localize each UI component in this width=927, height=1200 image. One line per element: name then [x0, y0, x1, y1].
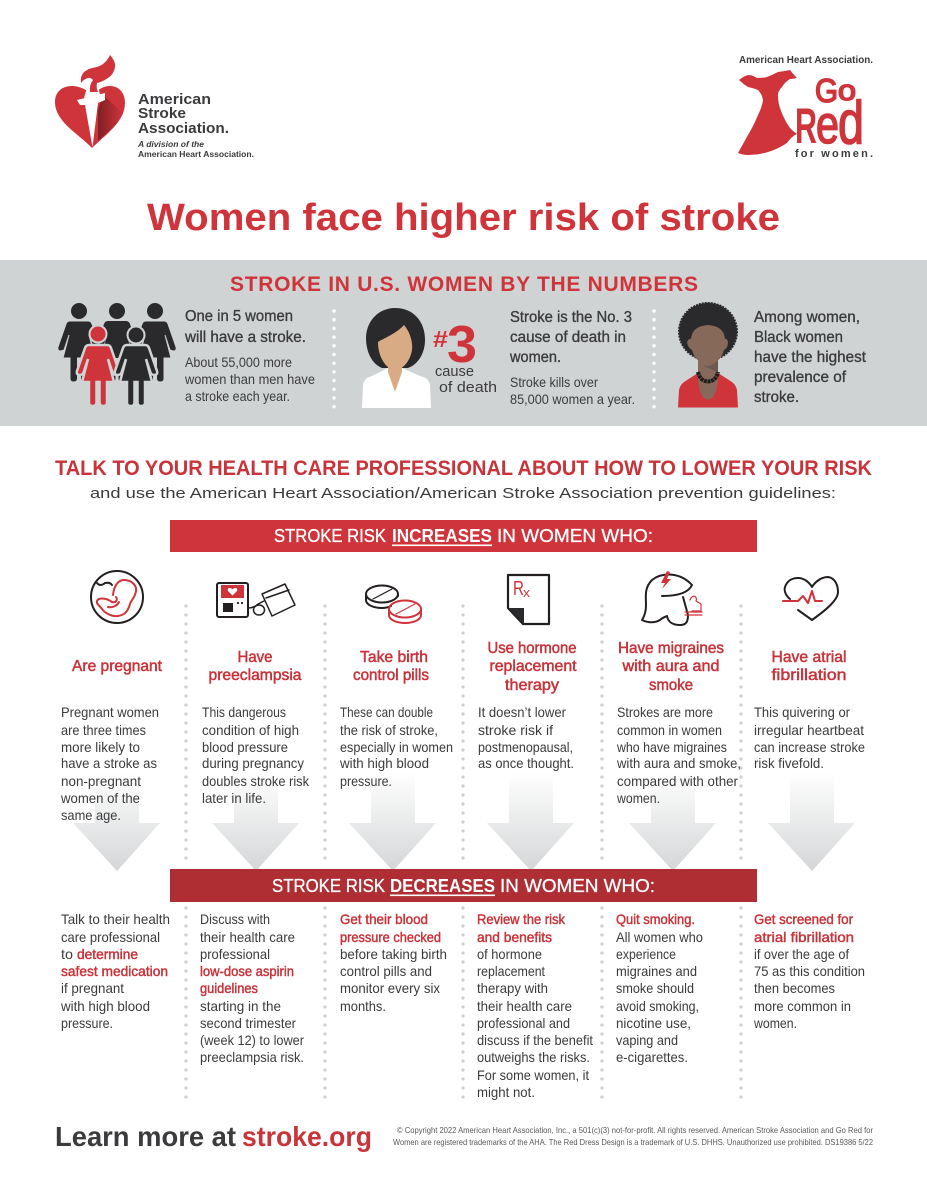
banner: stroke risk decreases: IN WOMEN WHO: [500, 876, 655, 896]
column dividers [186, 606, 741, 1100]
icon: prescription sheet [508, 575, 549, 624]
advice: pregnant: Talk to their health [61, 911, 170, 927]
footer: learn more: stroke.org [242, 1121, 372, 1152]
advice: hormone therapy [477, 911, 593, 1100]
advice: migraines: migraines and [616, 963, 697, 979]
stat: one in 5 women: One in 5 women [185, 308, 293, 325]
advice: hormone therapy: and benefits [477, 929, 552, 945]
icon: heart with pulse [783, 577, 838, 620]
stat: highest prevalence: have the highest [754, 349, 867, 366]
stat: one in 5 women [184, 308, 315, 404]
column: have atrial fibrillation: irregular heartbeat [754, 722, 864, 738]
stat: number 3 cause of death: Stroke is the No. 3 [510, 309, 632, 326]
advice: preeclampsia: professional [200, 946, 270, 962]
panel: stroke by the numbers [0, 260, 927, 426]
advice: migraines [616, 911, 703, 1065]
icon: blood pressure monitor [217, 583, 295, 617]
advice: atrial fibrillation: women. [753, 1015, 797, 1031]
column: take birth control pills [339, 586, 453, 789]
advice: hormone therapy: outweighs the risks. [477, 1049, 590, 1065]
column: have preeclampsia [202, 583, 310, 806]
column: have migraines with aura and smoke: Have migraines [618, 640, 724, 657]
advice: hormone therapy: professional and [477, 1015, 570, 1031]
column: have preeclampsia: blood pressure [202, 739, 288, 755]
footer: copyright: © Copyright 2022 American Heart Association, Inc., a 501(c)(3) not-for-profit. All rights reserved. American Stroke Association and Go Red for [397, 1125, 873, 1135]
stat graphic: #3 cause of death: 3 [447, 316, 477, 374]
logo: Go Red for Women: for women. [795, 148, 873, 160]
logo: American Stroke Association: Association. [138, 121, 229, 137]
column: take birth control pills: especially in women [340, 739, 453, 755]
advice: preeclampsia: (week 12) to lower [200, 1032, 304, 1048]
logo: Go Red for Women: R [795, 98, 817, 154]
column: take birth control pills: These can double [340, 704, 433, 720]
column: take birth control pills: pressure. [340, 773, 392, 789]
stat graphic: #3 cause of death: cause [435, 363, 474, 380]
column: use hormone replacement therapy: stroke risk if [478, 722, 553, 738]
column: have migraines with aura and smoke: who have migraines [616, 739, 727, 755]
advice: pregnant: to [61, 946, 73, 962]
heading: talk to your health care professional: TALK TO YOUR HEALTH CARE PROFESSIONAL ABOUT HOW TO LOWER YOUR RISK [55, 457, 872, 480]
advice: pregnant: pressure. [61, 1015, 113, 1031]
column: take birth control pills: the risk of stroke, [340, 722, 438, 738]
stat: highest prevalence: Among women, [754, 309, 860, 326]
banner: stroke risk decreases [170, 869, 757, 902]
advice: birth control: months. [340, 998, 386, 1014]
advice: preeclampsia: guidelines [200, 980, 258, 996]
column: have migraines with aura and smoke: women. [616, 790, 660, 806]
arrows: risk decreases [73, 772, 855, 871]
footer: learn more: Learn more at [55, 1121, 236, 1152]
advice: preeclampsia: preeclampsia risk. [200, 1049, 304, 1065]
column: take birth control pills: Take birth [360, 649, 428, 666]
column: are pregnant: Pregnant women [61, 704, 159, 720]
advice: migraines: smoke should [616, 980, 694, 996]
advice: preeclampsia [200, 911, 304, 1065]
column: have atrial fibrillation [754, 577, 865, 771]
column: are pregnant: women of the [60, 790, 140, 806]
banner: stroke risk increases [170, 520, 757, 552]
advice: pregnant [60, 911, 170, 1031]
advice: birth control: Get their blood [340, 911, 428, 927]
advice: hormone therapy: replacement [477, 963, 545, 979]
icon: red dress [738, 70, 797, 155]
stat: number 3 cause of death: women. [509, 349, 561, 366]
logo: Go Red for Women: G [815, 72, 838, 109]
banner: stroke risk increases: IN WOMEN WHO: [497, 526, 653, 546]
advice: preeclampsia: low-dose aspirin [200, 963, 294, 979]
column: are pregnant: more likely to [61, 739, 140, 755]
stat: one in 5 women: About 55,000 more [185, 354, 292, 370]
advice: preeclampsia: their health care [200, 929, 295, 945]
column: have preeclampsia: doubles stroke risk [202, 773, 310, 789]
stat: highest prevalence: stroke. [754, 389, 799, 406]
column: have preeclampsia: during pregnancy [202, 755, 304, 771]
logo: Go Red for Women: e [816, 95, 839, 155]
advice: atrial fibrillation: atrial fibrillation [754, 929, 854, 945]
advice: migraines: Quit smoking. [616, 911, 695, 927]
advice: pregnant: with high blood [60, 998, 150, 1014]
advice: preeclampsia: starting in the [200, 998, 281, 1014]
icon: woman with dark hair [362, 308, 431, 408]
column: use hormone replacement therapy: as once thought. [478, 755, 574, 771]
column: use hormone replacement therapy: Use hormone [488, 640, 577, 657]
advice: atrial fibrillation: more common in [754, 998, 851, 1014]
advice: preeclampsia: Discuss with [200, 911, 270, 927]
advice: migraines: avoid smoking, [616, 998, 699, 1014]
icon: heart and torch [55, 55, 125, 148]
logo: Go Red for Women: o [838, 75, 856, 107]
stat: number 3 cause of death: Stroke kills over [510, 374, 598, 390]
column: have migraines with aura and smoke: common in women [617, 722, 722, 738]
icon: prescription sheet: R [513, 578, 524, 600]
logo: American Stroke Association: American [138, 92, 211, 108]
logo: American Stroke Association: A division of the [137, 140, 205, 149]
column: have preeclampsia: preeclampsia [208, 667, 302, 684]
advice: migraines: nicotine use, [616, 1015, 691, 1031]
column: have atrial fibrillation: can increase stroke [754, 739, 865, 755]
subheading: prevention guidelines: and use the American Heart Association/American Stroke Association prevention guidelines: [90, 485, 836, 502]
advice: hormone therapy: might not. [477, 1084, 535, 1100]
stat: one in 5 women: will have a stroke. [184, 329, 306, 346]
column: have preeclampsia: condition of high [202, 722, 299, 738]
column: use hormone replacement therapy: replacement [490, 658, 577, 675]
banner: stroke risk increases: STROKE RISK [274, 526, 386, 546]
logo: Go Red for Women [738, 54, 873, 160]
stat: highest prevalence: Black women [754, 329, 843, 346]
icon: group of women [58, 303, 176, 406]
column: have migraines with aura and smoke: compared with other [617, 773, 738, 789]
column: have preeclampsia: later in life. [202, 790, 266, 806]
stat: one in 5 women: a stroke each year. [185, 388, 290, 404]
footer: copyright [393, 1125, 873, 1147]
stat graphic: #3 cause of death: # [433, 326, 448, 352]
stat: number 3 cause of death [509, 309, 635, 407]
advice: atrial fibrillation: then becomes [754, 980, 835, 996]
column: use hormone replacement therapy: It doesn’t lower [478, 704, 566, 720]
advice: birth control: control pills and [340, 963, 432, 979]
column: have migraines with aura and smoke: Strokes are more [617, 704, 713, 720]
stat: number 3 cause of death: 85,000 women a year. [510, 391, 635, 407]
column: have atrial fibrillation: risk fivefold. [754, 755, 824, 771]
logo: Go Red for Women: American Heart Association. [739, 54, 873, 66]
stat: highest prevalence: prevalence of [754, 369, 847, 386]
banner: stroke risk decreases: STROKE RISK [272, 876, 385, 896]
stat graphic: #3 cause of death [433, 316, 497, 396]
banner: stroke risk decreases: DECREASES [390, 876, 495, 896]
advice: pregnant: if pregnant [61, 980, 124, 996]
advice: pregnant: determine [77, 946, 138, 962]
icon: Black woman with red top [678, 303, 738, 408]
advice: migraines: experience [616, 946, 676, 962]
stat: one in 5 women: women than men have [184, 371, 315, 387]
column: have migraines with aura and smoke: with aura and smoke, [616, 755, 741, 771]
column: are pregnant: non-pregnant [61, 773, 141, 789]
title: Women face higher risk of stroke [147, 197, 780, 239]
advice: hormone therapy: of hormone [477, 946, 542, 962]
advice: atrial fibrillation: if over the age of [754, 946, 849, 962]
advice: hormone therapy: therapy with [477, 980, 548, 996]
advice: atrial fibrillation: Get screened for [754, 911, 853, 927]
advice: hormone therapy: Review the risk [477, 911, 566, 927]
icon: head with migraine and cigarette [642, 571, 702, 625]
icon: embryo [91, 571, 143, 623]
icon: prescription sheet: x [523, 585, 531, 600]
column: have atrial fibrillation: This quivering or [754, 704, 850, 720]
icon: pills [366, 586, 421, 623]
column: use hormone replacement therapy: therapy [505, 677, 559, 694]
column: are pregnant: are three times [61, 722, 146, 738]
advice: hormone therapy: For some women, it [477, 1067, 589, 1083]
column: use hormone replacement therapy [478, 575, 577, 771]
logo: American Stroke Association: Stroke [138, 106, 186, 122]
logo: Go Red for Women: d [838, 89, 864, 156]
advice: birth control: monitor every six [340, 980, 440, 996]
advice: atrial fibrillation: 75 as this condition [754, 963, 865, 979]
column: are pregnant: have a stroke as [61, 755, 157, 771]
stat graphic: #3 cause of death: of death [439, 379, 497, 396]
column: are pregnant: Are pregnant [72, 658, 163, 675]
advice: pregnant: safest medication [61, 963, 168, 979]
logo: American Stroke Association: American Heart Association. [138, 150, 254, 159]
advice: migraines: All women who [616, 929, 703, 945]
column: are pregnant [60, 571, 163, 823]
footer: copyright: Women are registered trademarks of the AHA. The Red Dress Design is a trademark of U.S. DHHS. Unauthorized use prohibited. DS19386 5/22 [393, 1137, 873, 1147]
stat: highest prevalence [754, 309, 867, 406]
column: have migraines with aura and smoke: with aura and [621, 658, 720, 675]
advice: hormone therapy: their health care [477, 998, 572, 1014]
banner: stroke risk increases: INCREASES [392, 526, 492, 546]
advice: birth control: pressure checked [340, 929, 441, 945]
advice: birth control [340, 911, 447, 1014]
column: have atrial fibrillation: Have atrial [772, 649, 846, 666]
advice: migraines: e-cigarettes. [616, 1049, 688, 1065]
column: take birth control pills: with high blood [339, 755, 429, 771]
advice: hormone therapy: discuss if the benefit [477, 1032, 593, 1048]
advice: birth control: before taking birth [340, 946, 447, 962]
advice: preeclampsia: second trimester [200, 1015, 296, 1031]
advice: pregnant: care professional [61, 929, 160, 945]
column: have preeclampsia: Have [238, 649, 273, 666]
advice: migraines: vaping and [616, 1032, 678, 1048]
footer: learn more [55, 1121, 372, 1152]
column: have migraines with aura and smoke [616, 571, 741, 806]
column: take birth control pills: control pills [353, 667, 429, 684]
column: are pregnant: same age. [61, 807, 121, 823]
column: have preeclampsia: This dangerous [202, 704, 286, 720]
advice: atrial fibrillation [753, 911, 865, 1031]
stat: number 3 cause of death: cause of death in [510, 329, 626, 346]
column: have atrial fibrillation: fibrillation [772, 667, 846, 684]
column: have migraines with aura and smoke: smoke [649, 677, 693, 694]
column: use hormone replacement therapy: postmenopausal, [478, 739, 573, 755]
logo: American Stroke Association [55, 55, 254, 159]
heading: by the numbers: STROKE IN U.S. WOMEN BY THE NUMBERS [230, 273, 698, 296]
